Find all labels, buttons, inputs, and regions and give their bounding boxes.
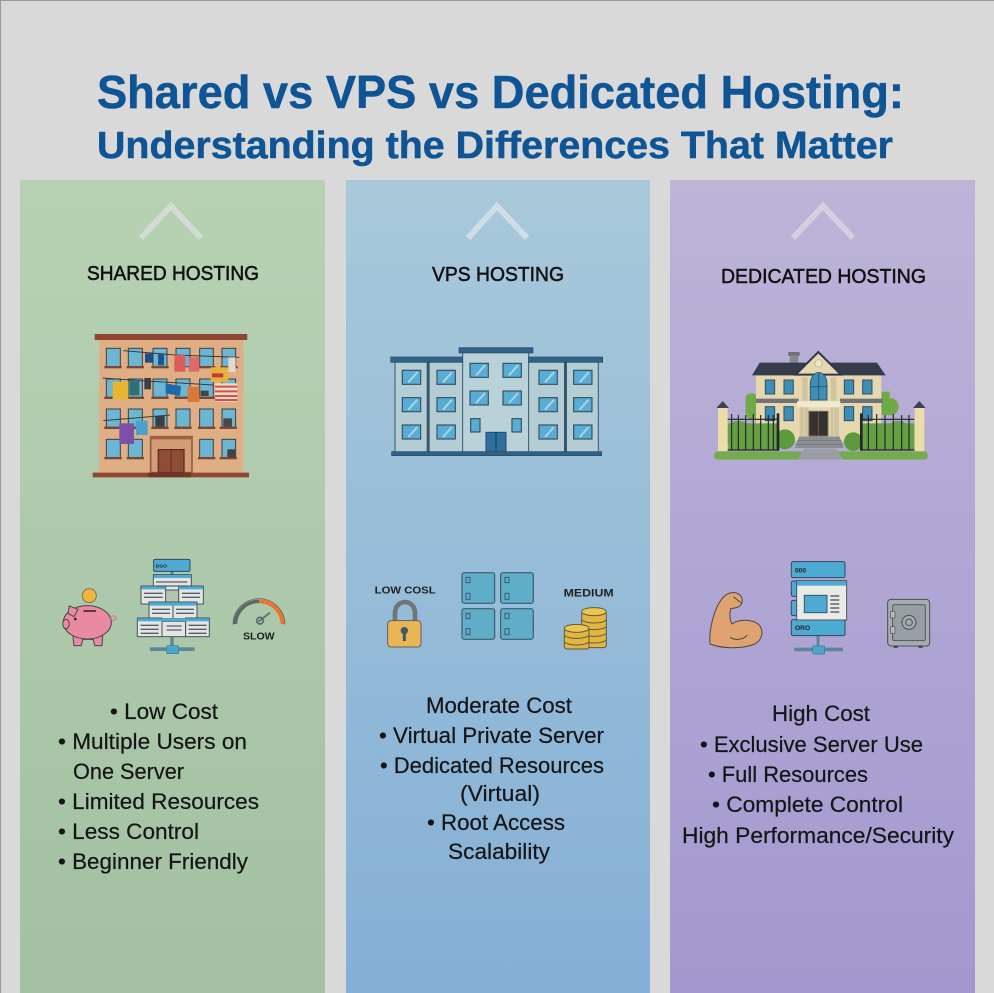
heading: shared hosting: SHARED HOSTING [87, 263, 259, 285]
icon: chevron up [793, 206, 853, 238]
icon: dedicated server: 000 [795, 567, 806, 574]
text block: vps hosting features [379, 693, 604, 864]
icon: slow speedometer [233, 599, 285, 643]
icon: padlock with label [375, 585, 436, 647]
text block: dedicated hosting features [682, 701, 954, 848]
title: Understanding the Differences That Matter [97, 125, 893, 167]
text block: shared hosting features: • Beginner Friendly [58, 849, 248, 874]
label: medium: MEDIUM [564, 588, 614, 600]
label: slow: SLOW [243, 632, 275, 643]
panel: vps hosting [346, 180, 650, 993]
text block: dedicated hosting features: High Cost [772, 701, 870, 726]
text block: vps hosting features: (Virtual) [460, 781, 540, 806]
text block: shared hosting features: • Limited Resources [58, 789, 259, 814]
heading: dedicated hosting: DEDICATED HOSTING [721, 266, 926, 288]
icon: chevron up [141, 206, 201, 238]
icon: dedicated server: ORO [795, 625, 810, 632]
icon: virtual server blocks [462, 573, 533, 639]
icon: gated mansion [714, 352, 928, 460]
panel: shared hosting [20, 180, 325, 993]
icon: crowded apartment building [93, 334, 249, 477]
icon: dedicated server [791, 562, 847, 654]
icon: shared server stack: DGO [156, 563, 167, 569]
text block: shared hosting features: • Less Control [58, 819, 199, 844]
text block: shared hosting features [58, 699, 259, 874]
text block: shared hosting features: • Multiple Users on [58, 729, 247, 754]
panel: dedicated hosting [670, 180, 975, 993]
text block: dedicated hosting features: • Exclusive Server Use [700, 732, 923, 757]
text block: vps hosting features: • Virtual Private Server [379, 723, 604, 748]
icon: flexed arm [710, 593, 762, 648]
text block: shared hosting features: • Low Cost [110, 699, 218, 724]
text block: vps hosting features: Scalability [448, 839, 550, 864]
title: Shared vs VPS vs Dedicated Hosting: [97, 66, 904, 118]
title [97, 66, 904, 167]
icon: office building [391, 348, 603, 456]
icon: coin stacks with label [564, 588, 614, 649]
icon: piggy bank [63, 589, 116, 646]
text block: shared hosting features: One Server [73, 759, 184, 784]
text block: vps hosting features: • Dedicated Resources [380, 753, 604, 778]
text block: dedicated hosting features: High Performance/Security [682, 823, 954, 848]
icon: safe [888, 599, 930, 648]
text block: dedicated hosting features: • Full Resources [708, 762, 868, 787]
heading: vps hosting: VPS HOSTING [432, 264, 564, 286]
text block: vps hosting features: • Root Access [427, 810, 565, 835]
text block: vps hosting features: Moderate Cost [426, 693, 572, 718]
icon: chevron up [468, 206, 527, 238]
text block: dedicated hosting features: • Complete Control [712, 792, 903, 817]
label: low cosl: LOW COSL [375, 585, 436, 596]
icon: shared server stack [137, 559, 209, 654]
